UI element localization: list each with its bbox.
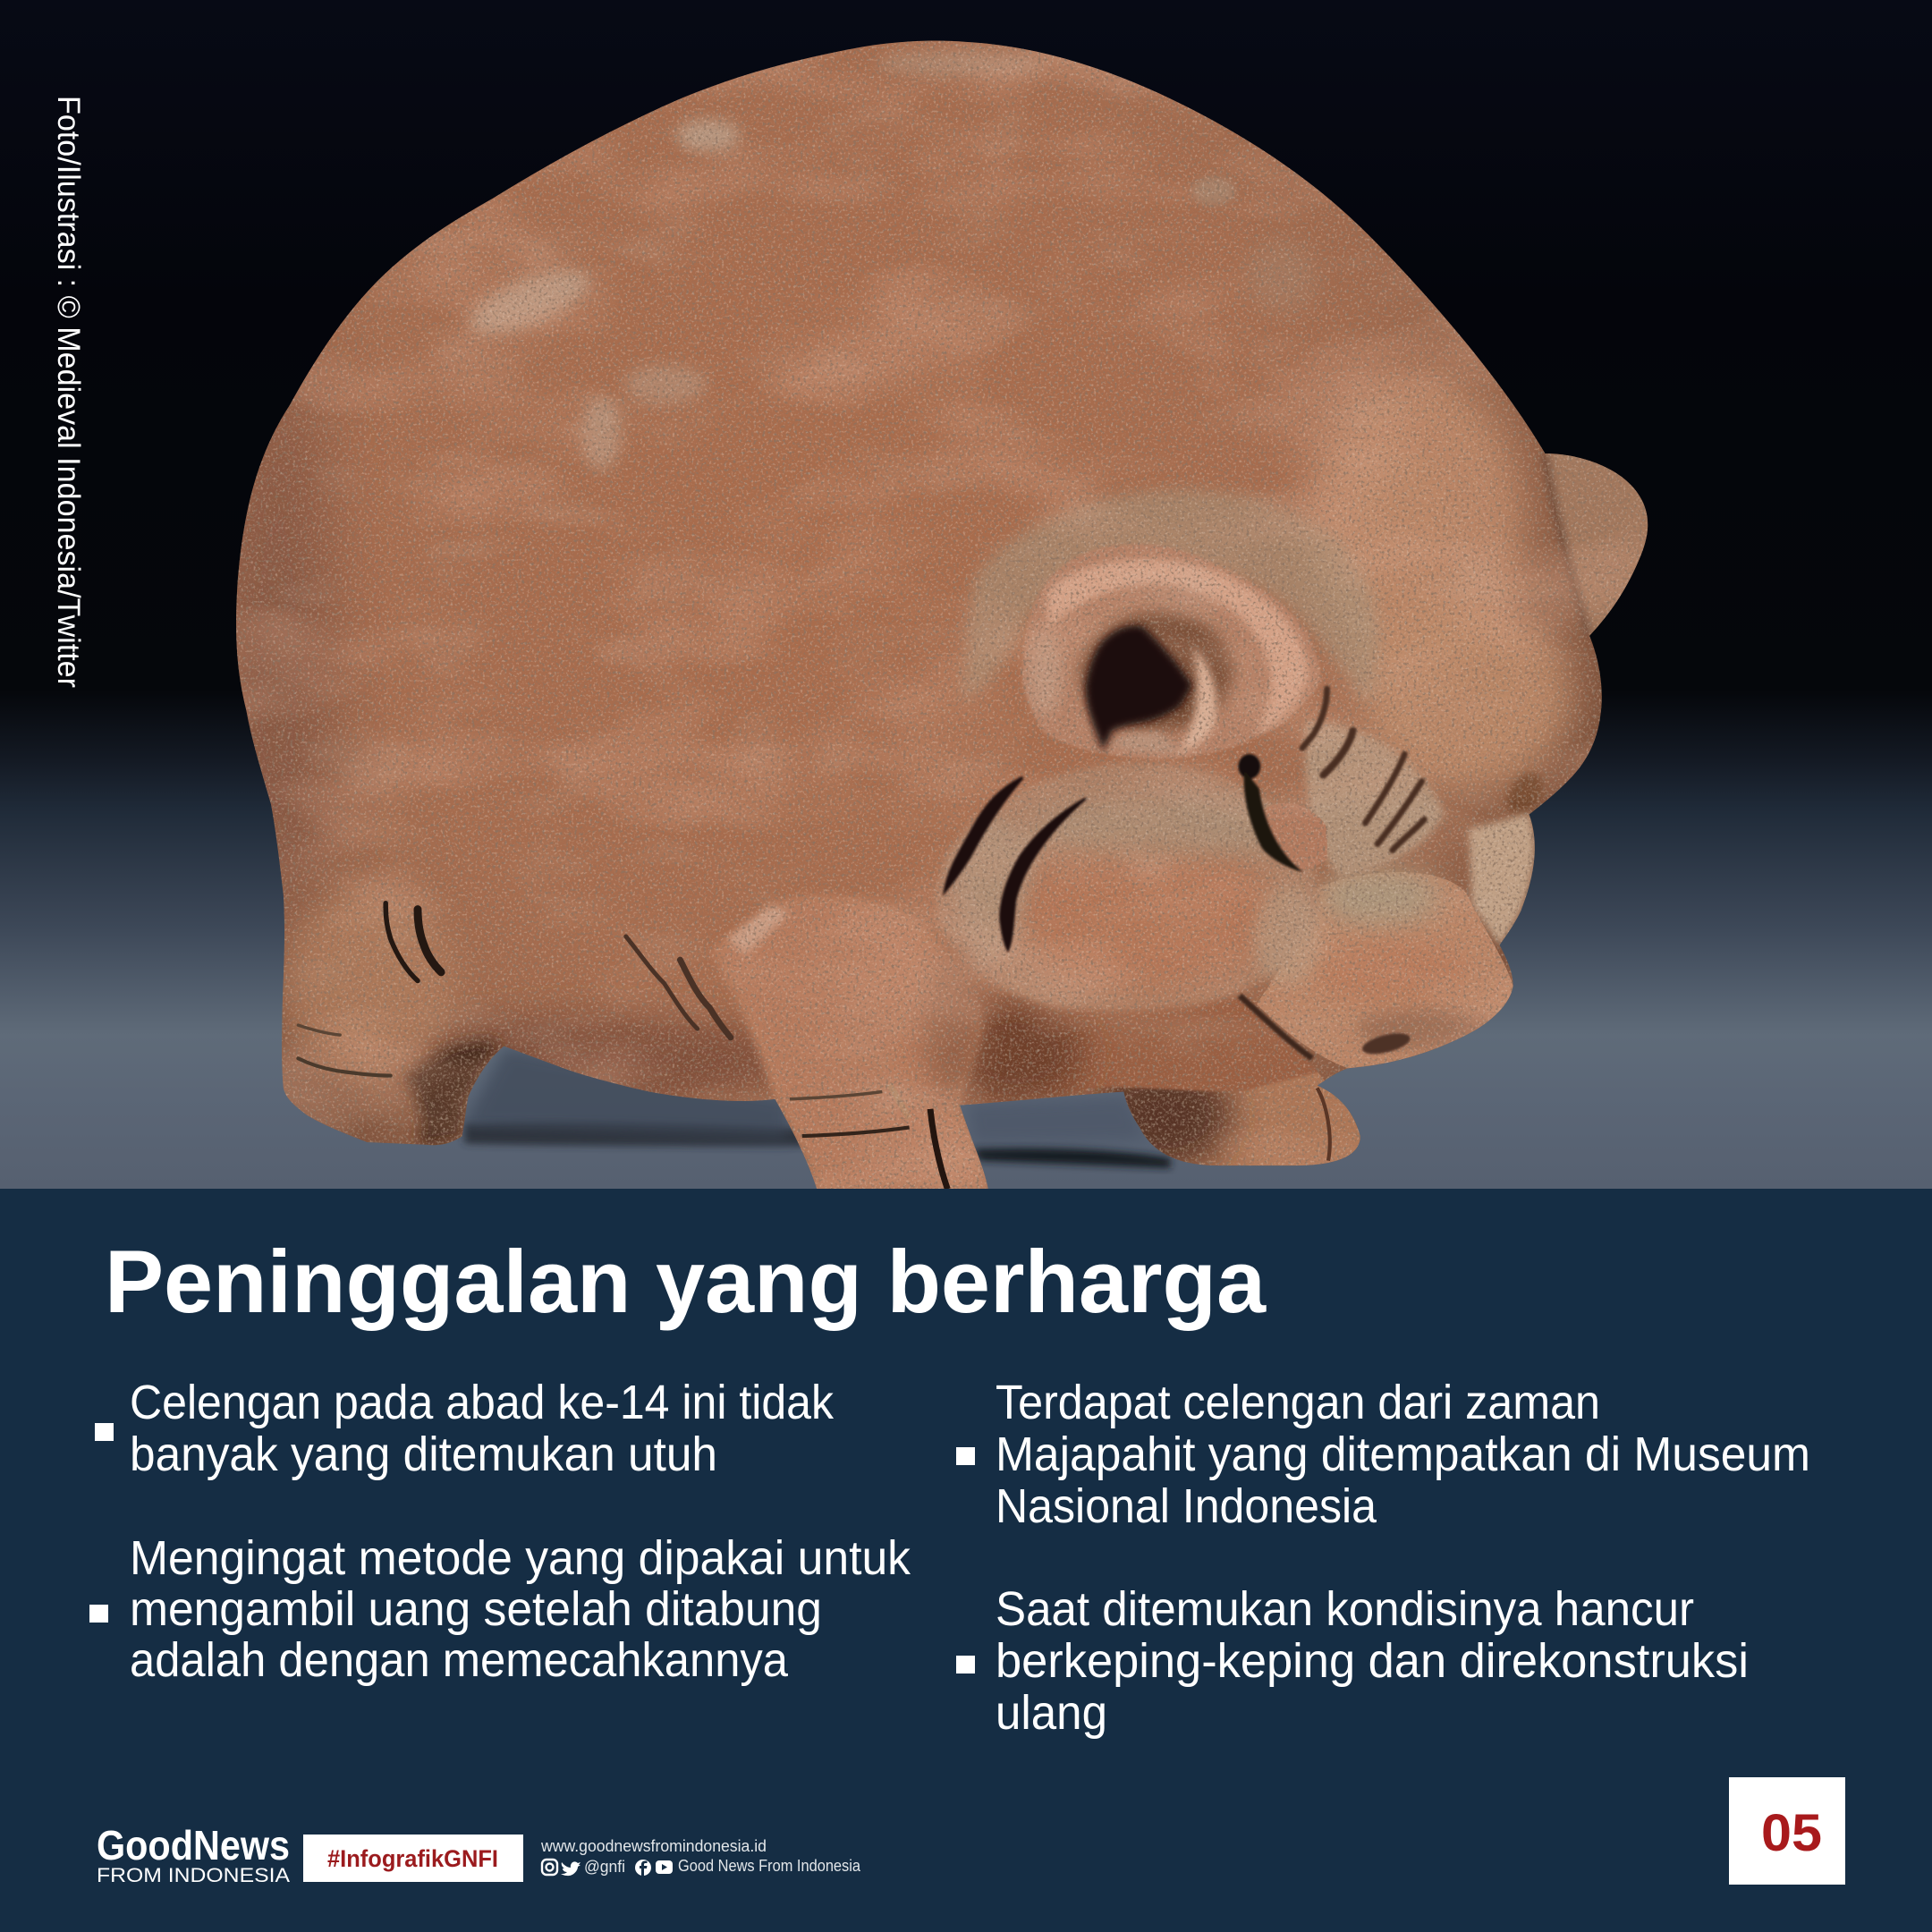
bullet: celengan utuh: banyak yang ditemukan utuh	[130, 1428, 717, 1481]
mouth line	[1240, 996, 1312, 1058]
page number box	[1729, 1777, 1845, 1885]
haunch shadow	[405, 1040, 500, 1146]
bullet: direkonstruksi	[956, 1582, 1749, 1740]
bullet: metode memecahkan: mengambil uang setelah ditabung	[130, 1582, 822, 1636]
bullet: direkonstruksi: ulang	[996, 1686, 1107, 1740]
ear hole	[1086, 625, 1192, 751]
cheek incisions	[945, 777, 1086, 950]
face lower side	[1469, 813, 1535, 945]
bullet: metode memecahkan	[89, 1531, 911, 1687]
piggy bank figure	[236, 41, 1648, 1189]
logo: GoodNews From Indonesia	[97, 1822, 290, 1886]
eye crease	[1238, 754, 1303, 872]
snout	[1257, 868, 1513, 1068]
eyelid	[1258, 803, 1327, 870]
bullet: museum nasional: Terdapat celengan dari zaman	[996, 1376, 1600, 1429]
website and social handles: @gnfi	[584, 1858, 625, 1876]
front leg	[709, 894, 988, 1189]
icon: twitter	[561, 1861, 580, 1876]
hashtag badge: #InfografikGNFI	[327, 1845, 498, 1872]
body shading and pale patches	[228, 52, 1571, 1104]
icon: youtube	[656, 1860, 673, 1874]
back ear crease	[1545, 453, 1589, 636]
brow around eye	[1305, 721, 1444, 877]
bullet: direkonstruksi: berkeping-keping dan direkonstruksi	[996, 1634, 1749, 1688]
panel: photo of terracotta piggy bank	[0, 0, 1932, 1195]
bullet: direkonstruksi: Saat ditemukan kondisinya hancur	[996, 1582, 1694, 1636]
bullet: metode memecahkan: adalah dengan memecahkannya	[130, 1633, 789, 1687]
nostril	[1360, 1030, 1412, 1058]
bullet: celengan utuh: Celengan pada abad ke-14 ini tidak	[130, 1376, 835, 1429]
photo credit: Foto/Ilustrasi : © Medieval Indonesia/Twitter	[51, 96, 86, 688]
front leg lines	[790, 1092, 947, 1189]
page number box: 05	[1761, 1804, 1822, 1862]
bullet: celengan utuh	[95, 1376, 835, 1481]
icon: facebook	[635, 1860, 651, 1876]
bullet: museum nasional: Nasional Indonesia	[996, 1479, 1377, 1533]
hashtag badge	[303, 1835, 523, 1882]
back ear	[1545, 453, 1648, 636]
bullet: museum nasional	[956, 1376, 1810, 1533]
chest shadow	[949, 998, 1084, 1109]
website and social handles: www.goodnewsfromindonesia.id	[540, 1837, 767, 1855]
ear	[1022, 544, 1321, 758]
front toe crease	[1318, 1088, 1330, 1161]
website and social handles	[540, 1837, 861, 1876]
belly wrinkles	[626, 936, 731, 1038]
back leg incisions	[298, 903, 441, 1076]
bullet: museum nasional: Majapahit yang ditempatkan di Museum	[996, 1428, 1810, 1481]
title: Peninggalan yang berharga	[105, 1232, 1267, 1331]
panel: navy text area	[0, 1189, 1932, 1932]
wrinkle lines beside eye	[1302, 689, 1424, 851]
cheek	[936, 762, 1322, 1011]
logo: GoodNews From Indonesia: GoodNews	[97, 1822, 290, 1868]
chest under cheek	[1082, 1000, 1317, 1092]
brown patch under brow	[1506, 771, 1544, 813]
icon: instagram	[542, 1860, 557, 1875]
logo: GoodNews From Indonesia: FROM INDONESIA	[97, 1864, 290, 1886]
front foot	[1084, 1072, 1360, 1165]
website and social handles: Good News From Indonesia	[678, 1857, 861, 1875]
floor shadow under piggy bank	[462, 1047, 1171, 1168]
clay grain texture	[185, 0, 1725, 1195]
bullet: metode memecahkan: Mengingat metode yang dipakai untuk	[130, 1531, 911, 1585]
